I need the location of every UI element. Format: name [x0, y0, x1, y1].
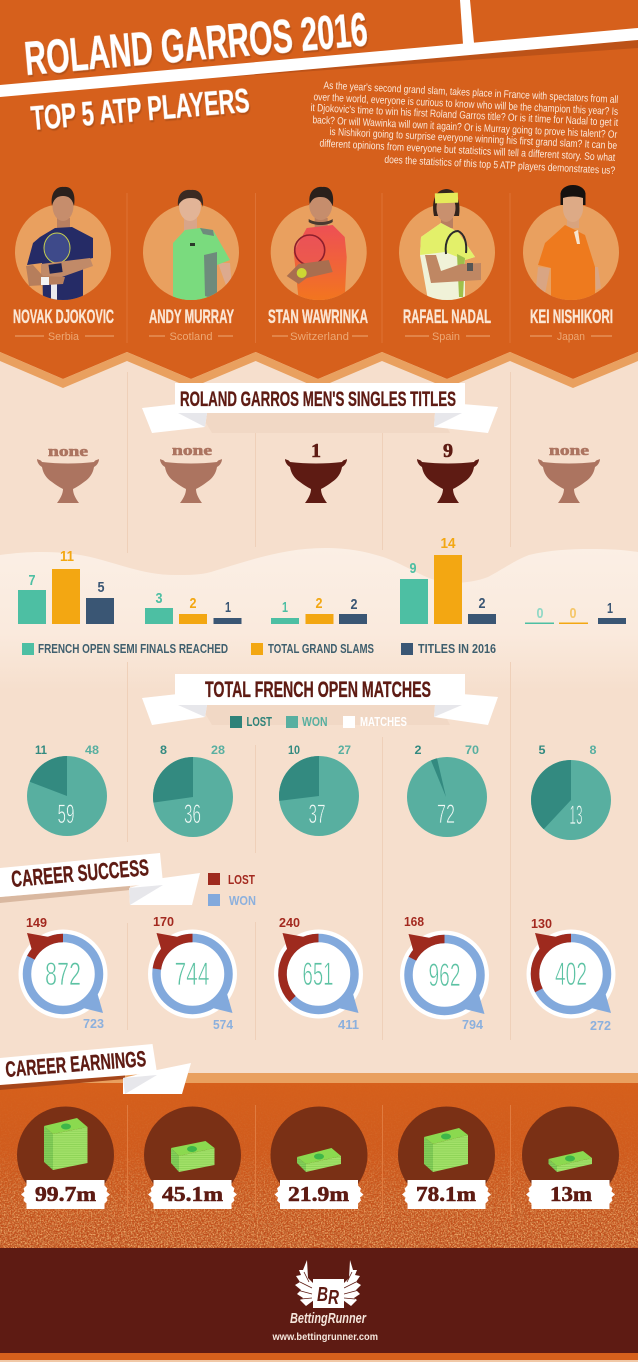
bar legend: TITLES IN 2016 — [418, 642, 496, 656]
earnings: Nadal: 78.1m — [416, 1182, 477, 1206]
bars: Djokovic: 7 — [28, 572, 36, 589]
donut: Nishikori — [526, 916, 616, 1033]
donut: Djokovic — [18, 915, 108, 1031]
donut: Murray — [148, 914, 237, 1032]
bars: Nishikori — [525, 600, 626, 624]
section: singles titles — [37, 383, 600, 503]
brand name: BettingRunner — [290, 1310, 367, 1327]
logo: R — [328, 1287, 339, 1309]
donut: Murray: 744 — [174, 956, 210, 992]
icon: money stack — [424, 1128, 468, 1172]
icon: money stack — [44, 1118, 88, 1170]
player: Kei Nishikori — [523, 185, 619, 343]
name: STAN WAWRINKA — [268, 307, 368, 328]
pie: Djokovic: 59 — [58, 799, 74, 829]
court line shadow — [200, 40, 638, 79]
trophy: Wawrinka 1 — [285, 440, 347, 503]
earnings: Nishikori: 13m — [550, 1182, 593, 1206]
success legend: WON — [229, 893, 256, 908]
portrait — [399, 189, 495, 300]
bar legend — [22, 642, 496, 656]
trophy: Djokovic none — [37, 444, 99, 503]
bars: Nadal: 9 — [410, 560, 416, 577]
donut: Wawrinka — [274, 915, 363, 1032]
pie: Nishikori: 8 — [590, 743, 597, 757]
earnings: Nishikori — [522, 1106, 619, 1209]
trophy: Nishikori none: none — [549, 443, 589, 459]
bars: Nishikori: 0 — [536, 605, 544, 622]
header panel — [0, 0, 638, 388]
bars: Wawrinka: 1 — [282, 599, 288, 616]
banner: singles titles: ROLAND GARROS MEN'S SINGLES TITLES — [180, 388, 456, 411]
success legend — [208, 872, 256, 908]
country: Spain — [432, 331, 460, 343]
country — [149, 331, 233, 343]
portrait — [271, 187, 367, 300]
player: Andy Murray — [143, 190, 239, 343]
name: ANDY MURRAY — [149, 307, 234, 328]
country: Switzerland — [290, 331, 349, 343]
trophy: Wawrinka 1: 1 — [311, 440, 321, 462]
earnings: Wawrinka: 21.9m — [288, 1182, 350, 1206]
earnings: Djokovic — [17, 1106, 114, 1209]
name: RAFAEL NADAL — [403, 307, 491, 328]
bar chart — [18, 535, 626, 656]
donut: Nadal: 168 — [404, 914, 424, 929]
portrait — [143, 190, 239, 300]
intro paragraph — [310, 80, 619, 177]
earnings: Nadal — [398, 1106, 495, 1209]
trophy: Nishikori none — [538, 443, 600, 503]
icon: money stack — [297, 1148, 341, 1172]
pie: Wawrinka — [279, 743, 359, 836]
banner: French Open matches: TOTAL FRENCH OPEN MATCHES — [205, 677, 431, 702]
success legend: LOST — [228, 872, 255, 887]
banner: career success — [0, 853, 200, 905]
bars: Wawrinka — [271, 595, 367, 624]
bars: Djokovic — [18, 548, 114, 624]
section: French Open matches — [27, 674, 611, 840]
trophy: Murray none: none — [172, 443, 212, 459]
earnings: Djokovic: 99.7m — [35, 1182, 97, 1206]
pie: Djokovic — [27, 743, 107, 836]
pie: Nadal: 70 — [465, 743, 479, 757]
donut: Nadal: 794 — [462, 1017, 484, 1032]
donut: Nishikori: 402 — [555, 956, 587, 992]
pie: Nishikori: 5 — [538, 743, 546, 757]
bars: Murray — [145, 590, 242, 624]
bars: Djokovic: 5 — [98, 579, 104, 596]
website: www.bettingrunner.com — [272, 1331, 378, 1343]
icon: money stack — [171, 1141, 214, 1172]
trophy: Djokovic none: none — [48, 444, 88, 460]
country: Japan — [557, 331, 585, 343]
bars: Nadal: 14 — [440, 535, 456, 552]
pie: Murray: 8 — [160, 743, 167, 757]
bars: Murray: 2 — [190, 595, 196, 612]
pie: Nishikori: 13 — [570, 800, 582, 830]
pie: Wawrinka: 10 — [288, 743, 300, 757]
country — [15, 331, 114, 343]
earnings: Murray — [144, 1106, 241, 1209]
pie: Djokovic: 48 — [85, 743, 99, 757]
pie: Murray: 28 — [211, 743, 225, 757]
logo: B — [317, 1284, 328, 1306]
pie legend — [230, 715, 407, 729]
trophy: Nadal 9: 9 — [443, 440, 453, 462]
court lines — [0, 0, 638, 97]
logo — [295, 1260, 361, 1309]
pie legend: WON — [302, 715, 328, 729]
clay court background — [0, 1073, 638, 1248]
pie: Wawrinka: 27 — [338, 743, 351, 757]
banner: career success: CAREER SUCCESS — [10, 854, 150, 892]
banner: career earnings — [0, 1044, 191, 1094]
country: Scotland — [170, 331, 212, 343]
wings — [295, 1260, 361, 1306]
player: Novak Djokovic — [13, 187, 114, 343]
country — [530, 331, 612, 343]
trophy: Murray none — [160, 443, 222, 503]
bars: Nadal: 2 — [478, 595, 486, 612]
pie legend: LOST — [246, 715, 272, 729]
pie: Nishikori — [531, 743, 611, 840]
banner: career earnings: CAREER EARNINGS — [4, 1046, 147, 1082]
donut: Nadal: 962 — [428, 957, 460, 993]
bars: Murray: 1 — [225, 599, 231, 616]
bars: Nishikori: 1 — [607, 600, 613, 617]
wave background — [0, 548, 638, 690]
pie: Murray — [153, 743, 233, 837]
donut: Nishikori: 130 — [531, 916, 552, 931]
earnings: Murray: 45.1m — [162, 1182, 224, 1206]
donut: Wawrinka: 240 — [279, 915, 300, 930]
bars: Djokovic: 11 — [60, 548, 74, 565]
feather lines — [297, 1272, 359, 1299]
country — [405, 331, 490, 343]
icon: money stack — [548, 1151, 592, 1172]
badge — [313, 1279, 344, 1308]
bars: Wawrinka: 2 — [350, 596, 358, 613]
donut: Nadal — [400, 914, 489, 1032]
player: Rafael Nadal — [399, 189, 495, 343]
banner: singles titles — [142, 383, 498, 433]
zigzag light band — [0, 352, 638, 388]
bars: Wawrinka: 2 — [316, 595, 322, 612]
trophy: Nadal 9 — [417, 440, 479, 503]
donut: Djokovic: 149 — [26, 915, 47, 930]
name: NOVAK DJOKOVIC — [13, 307, 114, 328]
pie legend: MATCHES — [360, 715, 407, 729]
bar legend: FRENCH OPEN SEMI FINALS REACHED — [38, 642, 228, 656]
donut: Murray: 170 — [153, 914, 174, 929]
pie: Nadal: 2 — [414, 743, 422, 757]
section: career earnings — [0, 1044, 638, 1248]
donut: Murray: 574 — [213, 1017, 234, 1032]
pie: Nadal: 72 — [437, 799, 455, 829]
donut: Djokovic: 723 — [83, 1016, 104, 1031]
pie: Wawrinka: 37 — [308, 799, 326, 829]
donut: Wawrinka: 411 — [338, 1017, 359, 1032]
banner: French Open matches — [142, 674, 498, 725]
portrait — [523, 185, 619, 300]
bars: Nadal — [400, 535, 496, 624]
earnings: Wawrinka — [270, 1106, 368, 1209]
country: Serbia — [48, 331, 80, 343]
subtitle: TOP 5 ATP PLAYERS — [29, 82, 251, 138]
footer — [0, 1248, 638, 1362]
section: career success — [0, 853, 616, 1033]
bars: Murray: 3 — [156, 590, 162, 607]
bars: Nishikori: 0 — [570, 605, 576, 622]
donut: Djokovic: 872 — [45, 956, 81, 992]
portrait — [15, 187, 111, 300]
pie: Djokovic: 11 — [35, 743, 47, 757]
orange header background — [0, 0, 638, 379]
pie: Nadal — [407, 743, 487, 837]
donut: Nishikori: 272 — [590, 1018, 611, 1033]
donut: Wawrinka: 651 — [302, 956, 334, 992]
country — [272, 331, 368, 343]
pie: Murray: 36 — [184, 799, 201, 829]
bar legend: TOTAL GRAND SLAMS — [268, 642, 374, 656]
player: Stan Wawrinka — [268, 187, 368, 343]
